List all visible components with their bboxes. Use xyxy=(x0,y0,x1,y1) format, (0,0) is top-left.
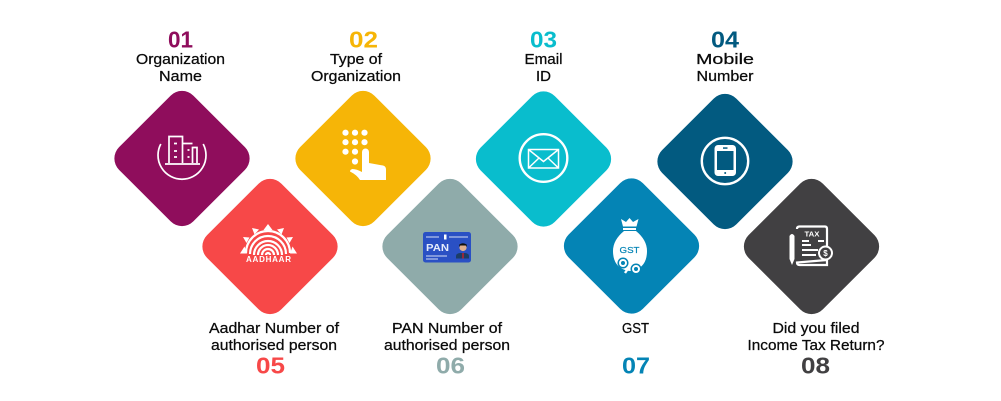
label: pan number of authorised person: authorised person xyxy=(384,338,510,354)
label: organization name: Organization xyxy=(136,52,225,68)
diamond 02 xyxy=(289,84,437,233)
label: did you filed income tax return xyxy=(748,321,884,354)
item 07: gst xyxy=(557,172,706,378)
label: mobile number xyxy=(696,52,754,85)
icon: envelope in circle xyxy=(520,134,567,182)
number 05: 05 xyxy=(256,352,285,378)
label: type of organization: Organization xyxy=(311,69,401,85)
number 01: 01 xyxy=(168,26,193,52)
icon: pan card: PAN xyxy=(426,242,449,254)
label: aadhar number of authorised person: Aadhar Number of xyxy=(209,321,340,337)
diamond 01 xyxy=(108,84,256,233)
number 03: 03 xyxy=(530,26,557,52)
icon: aadhaar logo: AADHAAR xyxy=(246,255,291,264)
icon: tax document: TAX xyxy=(804,230,820,238)
number 06: 06 xyxy=(436,352,465,378)
number 07: 07 xyxy=(622,352,650,378)
item 08: income tax return xyxy=(737,172,886,378)
label: type of organization: Type of xyxy=(330,52,383,68)
label: email id: ID xyxy=(536,69,551,85)
item 01: organization name xyxy=(108,26,256,233)
label: did you filed income tax return: Income Tax Return? xyxy=(748,338,884,354)
label: aadhar number of authorised person xyxy=(209,321,340,354)
label: gst: GST xyxy=(622,321,649,337)
number 04: 04 xyxy=(711,26,739,52)
icon: buildings xyxy=(158,136,206,179)
icon: gst money bag: GST xyxy=(620,245,640,255)
label: email id xyxy=(524,52,562,85)
diamond 06 xyxy=(376,172,524,321)
label: aadhar number of authorised person: authorised person xyxy=(211,338,337,354)
label: did you filed income tax return: Did you filed xyxy=(772,321,860,337)
label: type of organization xyxy=(311,52,401,85)
icon: phone in circle xyxy=(702,138,748,184)
diamond 04 xyxy=(651,87,799,236)
icon: pan card xyxy=(423,232,471,262)
label: mobile number: Mobile xyxy=(696,52,754,68)
label: organization name: Name xyxy=(159,69,202,85)
label: email id: Email xyxy=(524,52,562,68)
icon: tax document xyxy=(790,226,832,265)
item 03: email id xyxy=(469,26,618,233)
diamond 08 xyxy=(737,172,886,321)
icon: tax document: $ xyxy=(823,249,828,258)
item 05: aadhar number xyxy=(196,172,344,378)
item 06: pan number xyxy=(376,172,524,378)
number 02: 02 xyxy=(349,26,378,52)
label: pan number of authorised person xyxy=(384,321,510,354)
item 04: mobile number xyxy=(651,26,799,236)
diamond 07 xyxy=(557,172,706,320)
label: pan number of authorised person: PAN Number of xyxy=(392,321,503,337)
item 02: type of organization xyxy=(289,26,437,233)
number 08: 08 xyxy=(801,352,830,378)
label: mobile number: Number xyxy=(696,69,754,85)
label: organization name xyxy=(136,52,225,85)
diamond 05 xyxy=(196,172,344,321)
diamond 03 xyxy=(469,85,618,233)
icon: gst money bag xyxy=(613,218,647,274)
icon: keypad and finger xyxy=(342,130,386,180)
icon: aadhaar logo xyxy=(240,224,297,264)
